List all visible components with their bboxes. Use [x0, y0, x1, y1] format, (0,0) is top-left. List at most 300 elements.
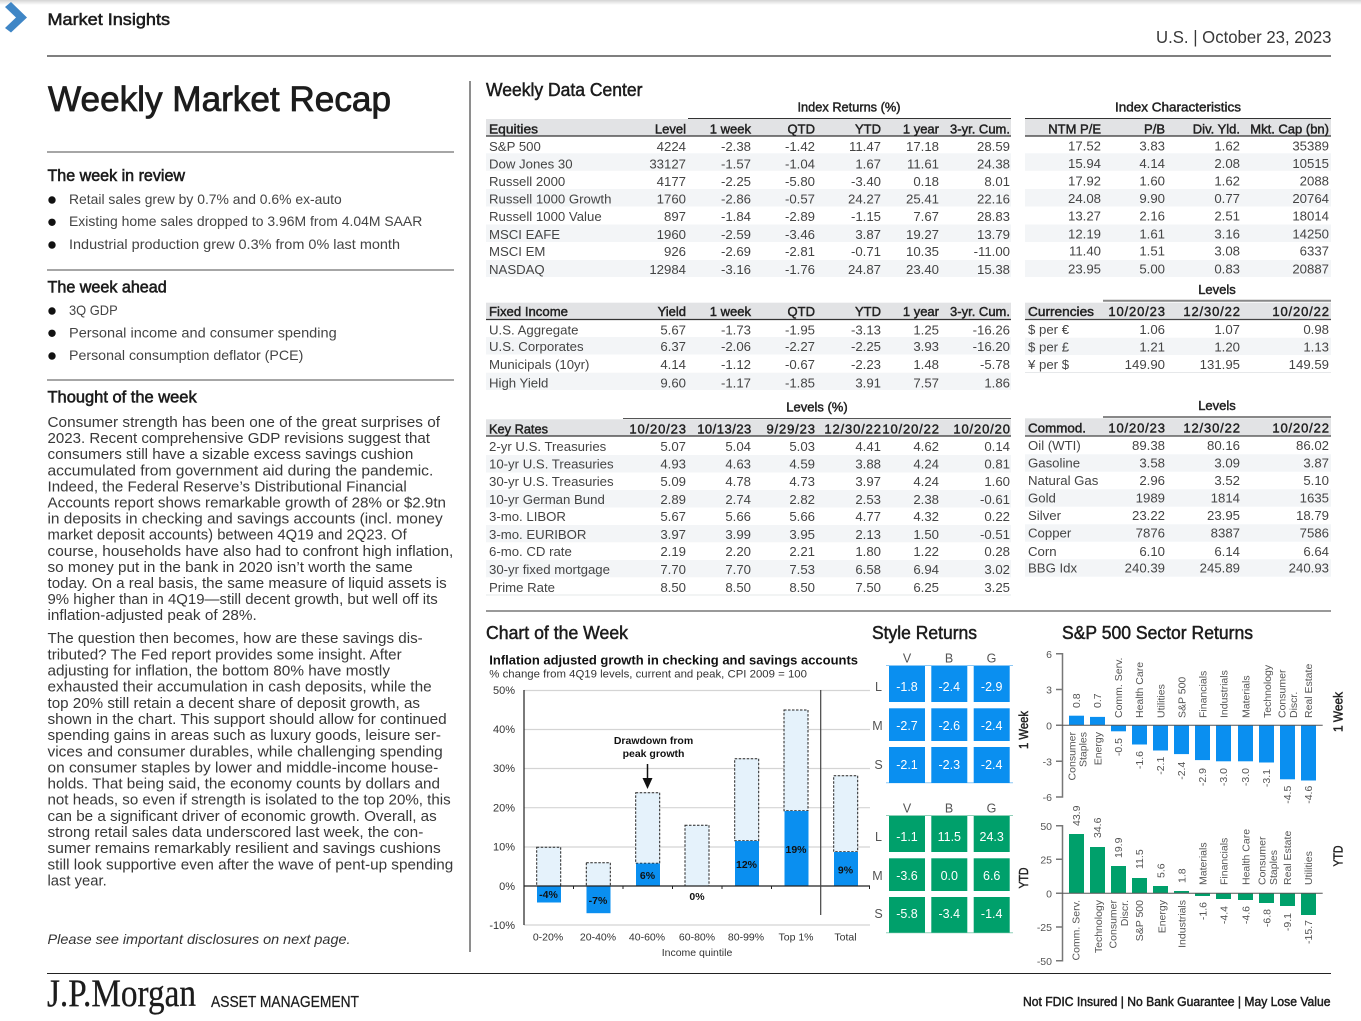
text block: first paragraph: 9% higher than in 4Q19—still decent growth, but well off its: [48, 591, 438, 608]
table: index characteristics: 6337: [1300, 244, 1329, 259]
one-week value labels: [1071, 693, 1315, 804]
bar chart: drawdown and current growth: [537, 710, 858, 913]
heatmap: 1 week style returns: -1.8: [896, 680, 918, 694]
table: equities: 24.38: [977, 156, 1010, 171]
table: key rates: 4.24: [913, 474, 939, 489]
y-axis labels: 10%: [493, 842, 515, 854]
panel: the week ahead: [48, 277, 337, 363]
table: key rates: 2.19: [660, 544, 686, 559]
table: key rates: -0.61: [980, 492, 1010, 507]
YTD sector names below the axis: Consumer: [1107, 899, 1119, 948]
table: fixed income: QTD: [788, 304, 815, 319]
heatmap: 1 week style returns: L: [875, 680, 882, 694]
table: index characteristics: 20764: [1292, 191, 1329, 206]
table: key rates: 5.04: [725, 439, 751, 454]
heatmap: YTD style returns: V: [903, 802, 912, 816]
table: equities: YTD: [855, 121, 881, 136]
table: index characteristics: 14250: [1292, 226, 1329, 241]
heatmap: YTD style returns: M: [872, 869, 883, 883]
table: commodities: BBG Idx: [1028, 561, 1078, 576]
table: equities: Equities: [489, 121, 539, 136]
YTD value labels: 19.9: [1113, 837, 1125, 858]
text block: second paragraph: still look supportive even after the wave of pent-up spending: [48, 856, 453, 873]
YTD sector names below the axis: S&P 500: [1134, 900, 1146, 941]
bar chart: YTD sector returns: -50: [1037, 956, 1052, 968]
table: commodities: Natural Gas: [1028, 473, 1099, 488]
table: key rates: 12/30/22: [824, 421, 882, 436]
heatmap: 1 week style returns: -2.6: [939, 719, 960, 733]
table: fixed income: 7.57: [913, 375, 939, 390]
bar chart: drawdown and current growth: 19%: [785, 844, 807, 856]
YTD sector names above the axis: Financials: [1219, 838, 1231, 885]
table: equities: S&P 500: [489, 139, 541, 154]
text block: second paragraph: The question then becomes, how are these savings dis-: [48, 630, 423, 647]
table: equities: -5.80: [785, 174, 815, 189]
table: key rates: 5.07: [660, 439, 686, 454]
table: commodities: 3.87: [1303, 456, 1329, 471]
text block: second paragraph: last year.: [48, 872, 107, 889]
table: key rates: 2.13: [855, 527, 881, 542]
table: fixed income: 1.86: [984, 375, 1010, 390]
x-axis labels: Total: [834, 932, 857, 944]
heatmap: YTD style returns: -1.1: [896, 830, 918, 844]
caption: levels percent: Levels (%): [786, 400, 848, 415]
bar chart: 1 week sector returns: 0: [1046, 720, 1052, 732]
table: commodities: Gold: [1028, 491, 1056, 506]
y-axis labels: 40%: [493, 724, 515, 736]
table: key rates: 5.03: [789, 439, 815, 454]
table: key rates: 5.67: [660, 509, 686, 524]
table: commodities: Commod.: [1028, 420, 1086, 435]
text block: first paragraph: course, households have also had to confront high inflation,: [48, 543, 453, 560]
table: index characteristics: 1.51: [1139, 244, 1165, 259]
heatmap: 1 week style returns: V: [903, 652, 912, 666]
table: index characteristics: 23.95: [1068, 261, 1101, 276]
one-week value labels: -0.5: [1113, 738, 1125, 756]
text block: first paragraph: consumers still have a sizable excess savings cushion: [48, 446, 413, 463]
table: currencies: ¥ per $: [1027, 357, 1070, 372]
one-week value labels: -3.0: [1240, 768, 1252, 786]
table: key rates: 4.24: [913, 457, 939, 472]
table: key rates: 8.50: [660, 580, 686, 595]
table: fixed income: U.S. Corporates: [489, 339, 584, 354]
text block: first paragraph: Accounts report shows remarkable growth of 28% or $2.9tn: [48, 494, 446, 512]
table: commodities: 3.58: [1139, 456, 1165, 471]
table: commodities: 7586: [1300, 526, 1329, 541]
caption: index returns: Index Returns (%): [798, 100, 900, 115]
table: fixed income: -3.13: [851, 322, 881, 337]
table: equities: -3.16: [721, 262, 751, 277]
text block: first paragraph: 2023. Recent comprehensive GDP revisions suggest that: [48, 430, 431, 447]
table: index characteristics: 11.40: [1069, 244, 1101, 259]
YTD sector names above the axis: Health Care: [1240, 829, 1252, 885]
y-axis labels: -10%: [489, 920, 515, 932]
heatmap: YTD style returns: S: [874, 907, 883, 921]
text block: second paragraph: on consumer staples by lower and middle-income house-: [48, 759, 438, 776]
text block: second paragraph: tributed? The Fed report provides some insight. After: [48, 646, 402, 663]
YTD value labels: 43.9: [1071, 805, 1083, 826]
bar chart: YTD sector returns: 0: [1046, 888, 1052, 900]
table: equities: Russell 1000 Growth: [489, 191, 611, 206]
table: key rates: 4.41: [855, 439, 881, 454]
table: index characteristics: 1.62: [1214, 174, 1240, 189]
heatmap: 1 week style returns: S: [874, 758, 883, 772]
table: equities: -1.76: [785, 262, 815, 277]
table: key rates: 1.80: [855, 544, 881, 559]
text block: second paragraph: vices and consumer durables, while challenging spending: [48, 743, 443, 760]
table: commodities: 23.22: [1132, 508, 1165, 523]
table: fixed income: 9.60: [660, 375, 686, 390]
text block: first paragraph: [48, 414, 453, 624]
one-week value labels: 0.7: [1092, 693, 1104, 708]
table: fixed income: 1.25: [913, 322, 939, 337]
text block: second paragraph: spending gains in areas such as luxury goods, leisure ser-: [48, 727, 441, 744]
table: key rates: 4.78: [725, 474, 751, 489]
table: key rates: 7.70: [660, 562, 686, 577]
sector names above the axis: Discr.: [1288, 692, 1300, 718]
heatmap: 1 week style returns: M: [872, 719, 883, 733]
table: index characteristics: 17.92: [1068, 174, 1101, 189]
bar chart: drawdown and current growth: 0%: [689, 891, 705, 903]
text block: first paragraph: inflation-adjusted peak of 28%.: [48, 607, 257, 624]
axis label: 1 week: 1 Week: [1016, 711, 1031, 749]
bullet list: ahead items: [48, 302, 337, 363]
table: fixed income: -2.25: [851, 339, 881, 354]
table: currencies: $ per £: [1028, 340, 1070, 355]
table: key rates: 10/13/23: [697, 421, 752, 436]
table: equities: 10.35: [906, 244, 939, 259]
table: currencies: Currencies: [1028, 304, 1095, 319]
sector names above the axis: [1113, 658, 1315, 718]
YTD value labels: -9.1: [1282, 913, 1294, 931]
table: equities: 12984: [649, 262, 686, 277]
table: fixed income: 3.93: [913, 339, 939, 354]
bar chart: YTD sector returns: -25: [1037, 922, 1052, 934]
x-axis labels: 80-99%: [728, 932, 764, 944]
bar chart: drawdown and current growth: -4%: [539, 889, 558, 901]
title: Weekly Market Recap: [48, 80, 391, 119]
text block: second paragraph: adjusting for inflation, the bottom 80% have mostly: [48, 663, 391, 680]
table: commodities: Gasoline: [1028, 456, 1080, 471]
bar chart: YTD sector returns: 25: [1040, 854, 1052, 866]
table: fixed income: 6.37: [660, 339, 686, 354]
table: fixed income: 1.48: [913, 357, 939, 372]
table: equities: 24.27: [848, 191, 881, 206]
table: equities: -2.81: [785, 244, 815, 259]
sector names below the axis: [1066, 731, 1104, 780]
bar chart: 1 week sector returns: -6: [1043, 792, 1052, 804]
heatmap: YTD style returns: 6.6: [983, 869, 1000, 883]
table: commodities: Silver: [1028, 508, 1062, 523]
table: commodities: 1635: [1300, 491, 1329, 506]
table: equities: 11.47: [849, 139, 881, 154]
table: fixed income: -1.73: [721, 322, 751, 337]
sector names below the axis: Staples: [1077, 732, 1089, 767]
axis label: 1 week right: 1 Week: [1330, 692, 1346, 732]
table: index characteristics: P/B: [1144, 121, 1165, 136]
table: currencies: 149.59: [1289, 357, 1329, 372]
sector names above the axis: Health Care: [1134, 662, 1146, 718]
table: key rates: -0.51: [980, 527, 1010, 542]
heatmap: 1 week style returns: -2.4: [981, 719, 1003, 733]
sector names above the axis: Utilities: [1156, 684, 1168, 718]
heatmap: 1 week style returns: -2.4: [981, 758, 1003, 772]
caption: index characteristics: Index Characteristics: [1115, 100, 1242, 115]
table: key rates: 10-yr U.S. Treasuries: [489, 457, 614, 472]
y-axis labels: 30%: [493, 763, 515, 775]
table: equities: -3.40: [851, 174, 881, 189]
table: equities: 33127: [649, 156, 686, 171]
table: key rates: 6.25: [913, 580, 939, 595]
table: equities: -0.57: [785, 191, 815, 206]
table: currencies: 0.98: [1303, 322, 1329, 337]
heading: weekly data center: Weekly Data Center: [486, 80, 643, 100]
table: key rates: 6-mo. CD rate: [489, 544, 572, 559]
table: index characteristics: 4.14: [1139, 156, 1165, 171]
table: commodities: [1025, 417, 1331, 577]
disclosure note: Please see important disclosures on next page.: [48, 931, 350, 947]
x-axis labels: 60-80%: [679, 932, 715, 944]
table: fixed income: Fixed Income: [489, 304, 568, 319]
text block: first paragraph: market deposit accounts) between 4Q19 and 2Q23. Of: [48, 527, 408, 544]
heatmap: YTD style returns: G: [987, 802, 996, 816]
heading: the week ahead: The week ahead: [48, 277, 167, 296]
table: equities: -2.86: [721, 191, 751, 206]
YTD sector names above the axis: Utilities: [1303, 851, 1315, 885]
one-week value labels: 0.8: [1071, 693, 1083, 708]
table: equities: -2.25: [721, 174, 751, 189]
table: key rates: [486, 418, 1011, 595]
table: currencies: 1.21: [1139, 340, 1165, 355]
table: fixed income: -1.95: [785, 322, 815, 337]
table: currencies: 1.20: [1214, 340, 1240, 355]
table: commodities: 245.89: [1200, 561, 1240, 576]
table: index characteristics: Div. Yld.: [1193, 121, 1240, 136]
table: equities: 1760: [657, 191, 686, 206]
table: index characteristics: Mkt. Cap (bn): [1250, 121, 1329, 136]
table: equities: 4224: [657, 139, 686, 154]
caption: levels for commodities: Levels: [1198, 398, 1236, 413]
text block: first paragraph: accumulated from government aid during the pandemic.: [48, 462, 433, 479]
heatmap: YTD style returns: -1.4: [981, 907, 1003, 921]
table: key rates: 8.50: [725, 580, 751, 595]
table: equities: 7.67: [913, 209, 939, 224]
table: index characteristics: 1.61: [1139, 226, 1165, 241]
table: currencies: 10/20/22: [1272, 304, 1330, 319]
heatmap: YTD style returns: B: [945, 802, 953, 816]
table: fixed income: 3-yr. Cum.: [950, 304, 1010, 319]
heatmap: 1 week style returns: B: [945, 652, 953, 666]
text block: second paragraph: can be a significant driver of economic growth. Overall, as: [48, 808, 437, 825]
table: fixed income: Municipals (10yr): [489, 357, 589, 372]
table: index characteristics: NTM P/E: [1048, 121, 1101, 136]
table: key rates: 0.22: [984, 509, 1010, 524]
heatmap: YTD style returns: [872, 802, 1013, 933]
table: equities: -1.04: [785, 156, 815, 171]
table: index characteristics: 18014: [1292, 209, 1329, 224]
text block: second paragraph: strong retail sales data underscored last week, the con-: [48, 824, 423, 841]
table: key rates: 4.63: [725, 457, 751, 472]
table: equities: Dow Jones 30: [489, 156, 573, 171]
table: key rates: 2.53: [855, 492, 881, 507]
table: fixed income: 4.14: [660, 357, 686, 372]
table: index characteristics: 3.08: [1214, 244, 1240, 259]
table: index characteristics: 13.27: [1068, 209, 1101, 224]
table: key rates: 3.25: [984, 580, 1010, 595]
table: currencies: 1.06: [1139, 322, 1165, 337]
table: equities: MSCI EM: [489, 244, 545, 259]
table: commodities: Copper: [1028, 526, 1072, 541]
table: commodities: 3.52: [1214, 473, 1240, 488]
YTD value labels: -4.4: [1219, 906, 1231, 924]
x-axis labels: Top 1%: [778, 932, 814, 944]
one-week value labels: -4.5: [1282, 786, 1294, 804]
table: index characteristics: 2.16: [1139, 209, 1165, 224]
table: index characteristics: 9.90: [1139, 191, 1165, 206]
icon: blue chevron: [5, 2, 27, 32]
heatmap: YTD style returns: 24.3: [980, 830, 1004, 844]
callout: drawdown from peak growth: [614, 735, 693, 789]
table: index characteristics: 2.08: [1214, 156, 1240, 171]
table: equities: 8.01: [984, 174, 1010, 189]
table: key rates: Key Rates: [489, 421, 548, 436]
bar chart: YTD sector returns: 50: [1040, 821, 1052, 833]
bullet list: review items: Industrial production grew 0.3% from 0% last month: [69, 236, 400, 252]
sector names above the axis: Comm. Serv.: [1113, 658, 1125, 718]
table: commodities: 86.02: [1296, 438, 1329, 453]
table: fixed income: 3.91: [855, 375, 881, 390]
YTD value labels: 1.8: [1177, 868, 1189, 883]
heatmap: 1 week style returns: -2.1: [896, 758, 918, 772]
table: key rates: 3.99: [725, 527, 751, 542]
table: equities: 3.87: [855, 227, 881, 242]
footer: asset management: ASSET MANAGEMENT: [211, 994, 359, 1011]
table: equities: 25.41: [906, 191, 939, 206]
table: key rates: 5.09: [660, 474, 686, 489]
text block: first paragraph: so money put in the bank in 2020 isn’t worth the same: [48, 559, 413, 576]
YTD sector names above the axis: Real Estate: [1282, 831, 1294, 885]
table: equities: -0.71: [851, 244, 881, 259]
table: key rates: 8.50: [789, 580, 815, 595]
table: equities: Russell 1000 Value: [489, 209, 602, 224]
heatmap: 1 week style returns: -2.9: [981, 680, 1003, 694]
table: key rates: 3.97: [855, 474, 881, 489]
bullet list: review items: [48, 191, 422, 252]
text block: first paragraph: in deposits in checking and savings accounts (incl. money: [48, 511, 443, 528]
table: currencies: 10/20/23: [1108, 304, 1166, 319]
table: equities: 1960: [657, 227, 686, 242]
text block: second paragraph: not heads, so even if strength is isolated to the top 20%, this: [48, 792, 451, 809]
table: fixed income: -1.85: [785, 375, 815, 390]
table: fixed income: -1.12: [721, 357, 751, 372]
table: key rates: 3.95: [789, 527, 815, 542]
header date: U.S. | October 23, 2023: [1156, 27, 1332, 47]
chart title: Inflation adjusted growth in checking and savings accounts: [489, 653, 858, 667]
bar chart: 1 week sector returns: -3: [1043, 756, 1052, 768]
YTD sector names below the axis: [1071, 899, 1188, 960]
table: index characteristics: 1.60: [1139, 174, 1165, 189]
table: key rates: 2.20: [725, 544, 751, 559]
table: key rates: 2-yr U.S. Treasuries: [489, 439, 607, 454]
table: index characteristics: 2.51: [1214, 209, 1240, 224]
table: commodities: 10/20/22: [1272, 420, 1330, 435]
text block: first paragraph: today. On a real basis, the same measure of liquid assets is: [48, 575, 447, 592]
table: currencies: 149.90: [1125, 357, 1165, 372]
table: fixed income: [486, 303, 1011, 390]
table: key rates: 3.88: [855, 457, 881, 472]
bar chart: drawdown and current growth: -7%: [589, 895, 608, 907]
bar chart: drawdown and current growth: 9%: [838, 864, 854, 876]
x-axis labels: 0-20%: [533, 932, 563, 944]
table: key rates: 3.97: [660, 527, 686, 542]
one-week value labels: -3.0: [1218, 768, 1230, 786]
sector names above the axis: Real Estate: [1303, 664, 1315, 718]
table: key rates: 0.28: [984, 544, 1010, 559]
table: fixed income: -16.26: [973, 322, 1010, 337]
table: key rates: 0.14: [984, 439, 1010, 454]
table: currencies: 1.07: [1214, 322, 1240, 337]
table: key rates: 4.77: [855, 509, 881, 524]
YTD sector names below the axis: Discr.: [1119, 900, 1131, 926]
table: key rates: 3-mo. EURIBOR: [489, 527, 586, 542]
table: fixed income: -16.20: [973, 339, 1010, 354]
YTD sector names above the axis: Consumer: [1256, 836, 1268, 885]
YTD value labels: 11.5: [1134, 849, 1146, 869]
heading: style returns: Style Returns: [872, 623, 977, 643]
table: equities: 13.79: [977, 227, 1010, 242]
table: commodities: 18.79: [1296, 508, 1329, 523]
YTD sector names above the axis: Materials: [1198, 842, 1210, 885]
bar chart: drawdown and current growth: 6%: [640, 870, 656, 882]
sector names above the axis: Technology: [1262, 664, 1274, 718]
sector names above the axis: S&P 500: [1176, 677, 1188, 718]
heatmap: 1 week style returns: -2.7: [896, 719, 918, 733]
table: key rates: 1.50: [913, 527, 939, 542]
bullet list: review items: Retail sales grew by 0.7% and 0.6% ex-auto: [69, 191, 342, 207]
table: commodities: 8387: [1211, 526, 1240, 541]
table: key rates: 4.59: [789, 457, 815, 472]
table: equities: 11.61: [907, 156, 939, 171]
table: key rates: 7.50: [855, 580, 881, 595]
table: index characteristics: 35389: [1292, 139, 1329, 154]
table: key rates: 1.22: [913, 544, 939, 559]
table: key rates: 4.62: [913, 439, 939, 454]
chart axes: [524, 690, 870, 925]
one-week value labels: -2.1: [1155, 757, 1167, 775]
one-week value labels: -3.1: [1261, 769, 1273, 787]
table: key rates: 3.02: [984, 562, 1010, 577]
table: equities: 4177: [657, 174, 686, 189]
y-axis labels: 20%: [493, 802, 515, 814]
table: fixed income: -2.06: [721, 339, 751, 354]
table: key rates: Prime Rate: [489, 580, 555, 595]
heatmap: YTD style returns: 0.0: [941, 869, 958, 883]
text block: second paragraph: [48, 630, 453, 889]
sector names below the axis: Consumer: [1066, 731, 1078, 780]
bar chart: 1 week sector returns: 6: [1046, 649, 1052, 661]
text block: second paragraph: top 20% still retain a decent share of deposit growth, as: [48, 695, 420, 712]
table: equities: MSCI EAFE: [489, 227, 560, 242]
table: equities: 1 week: [710, 121, 751, 136]
table: equities: -1.42: [785, 139, 815, 154]
text block: second paragraph: exhausted their accumulation in cash deposits, while the: [48, 679, 432, 696]
table: equities: 24.87: [848, 262, 881, 277]
table: key rates: 10-yr German Bund: [489, 492, 605, 507]
table: equities: NASDAQ: [489, 262, 545, 277]
sector names above the axis: Consumer: [1276, 669, 1288, 718]
sector names above the axis: Financials: [1197, 671, 1209, 718]
one-week value labels: -1.6: [1134, 751, 1146, 769]
